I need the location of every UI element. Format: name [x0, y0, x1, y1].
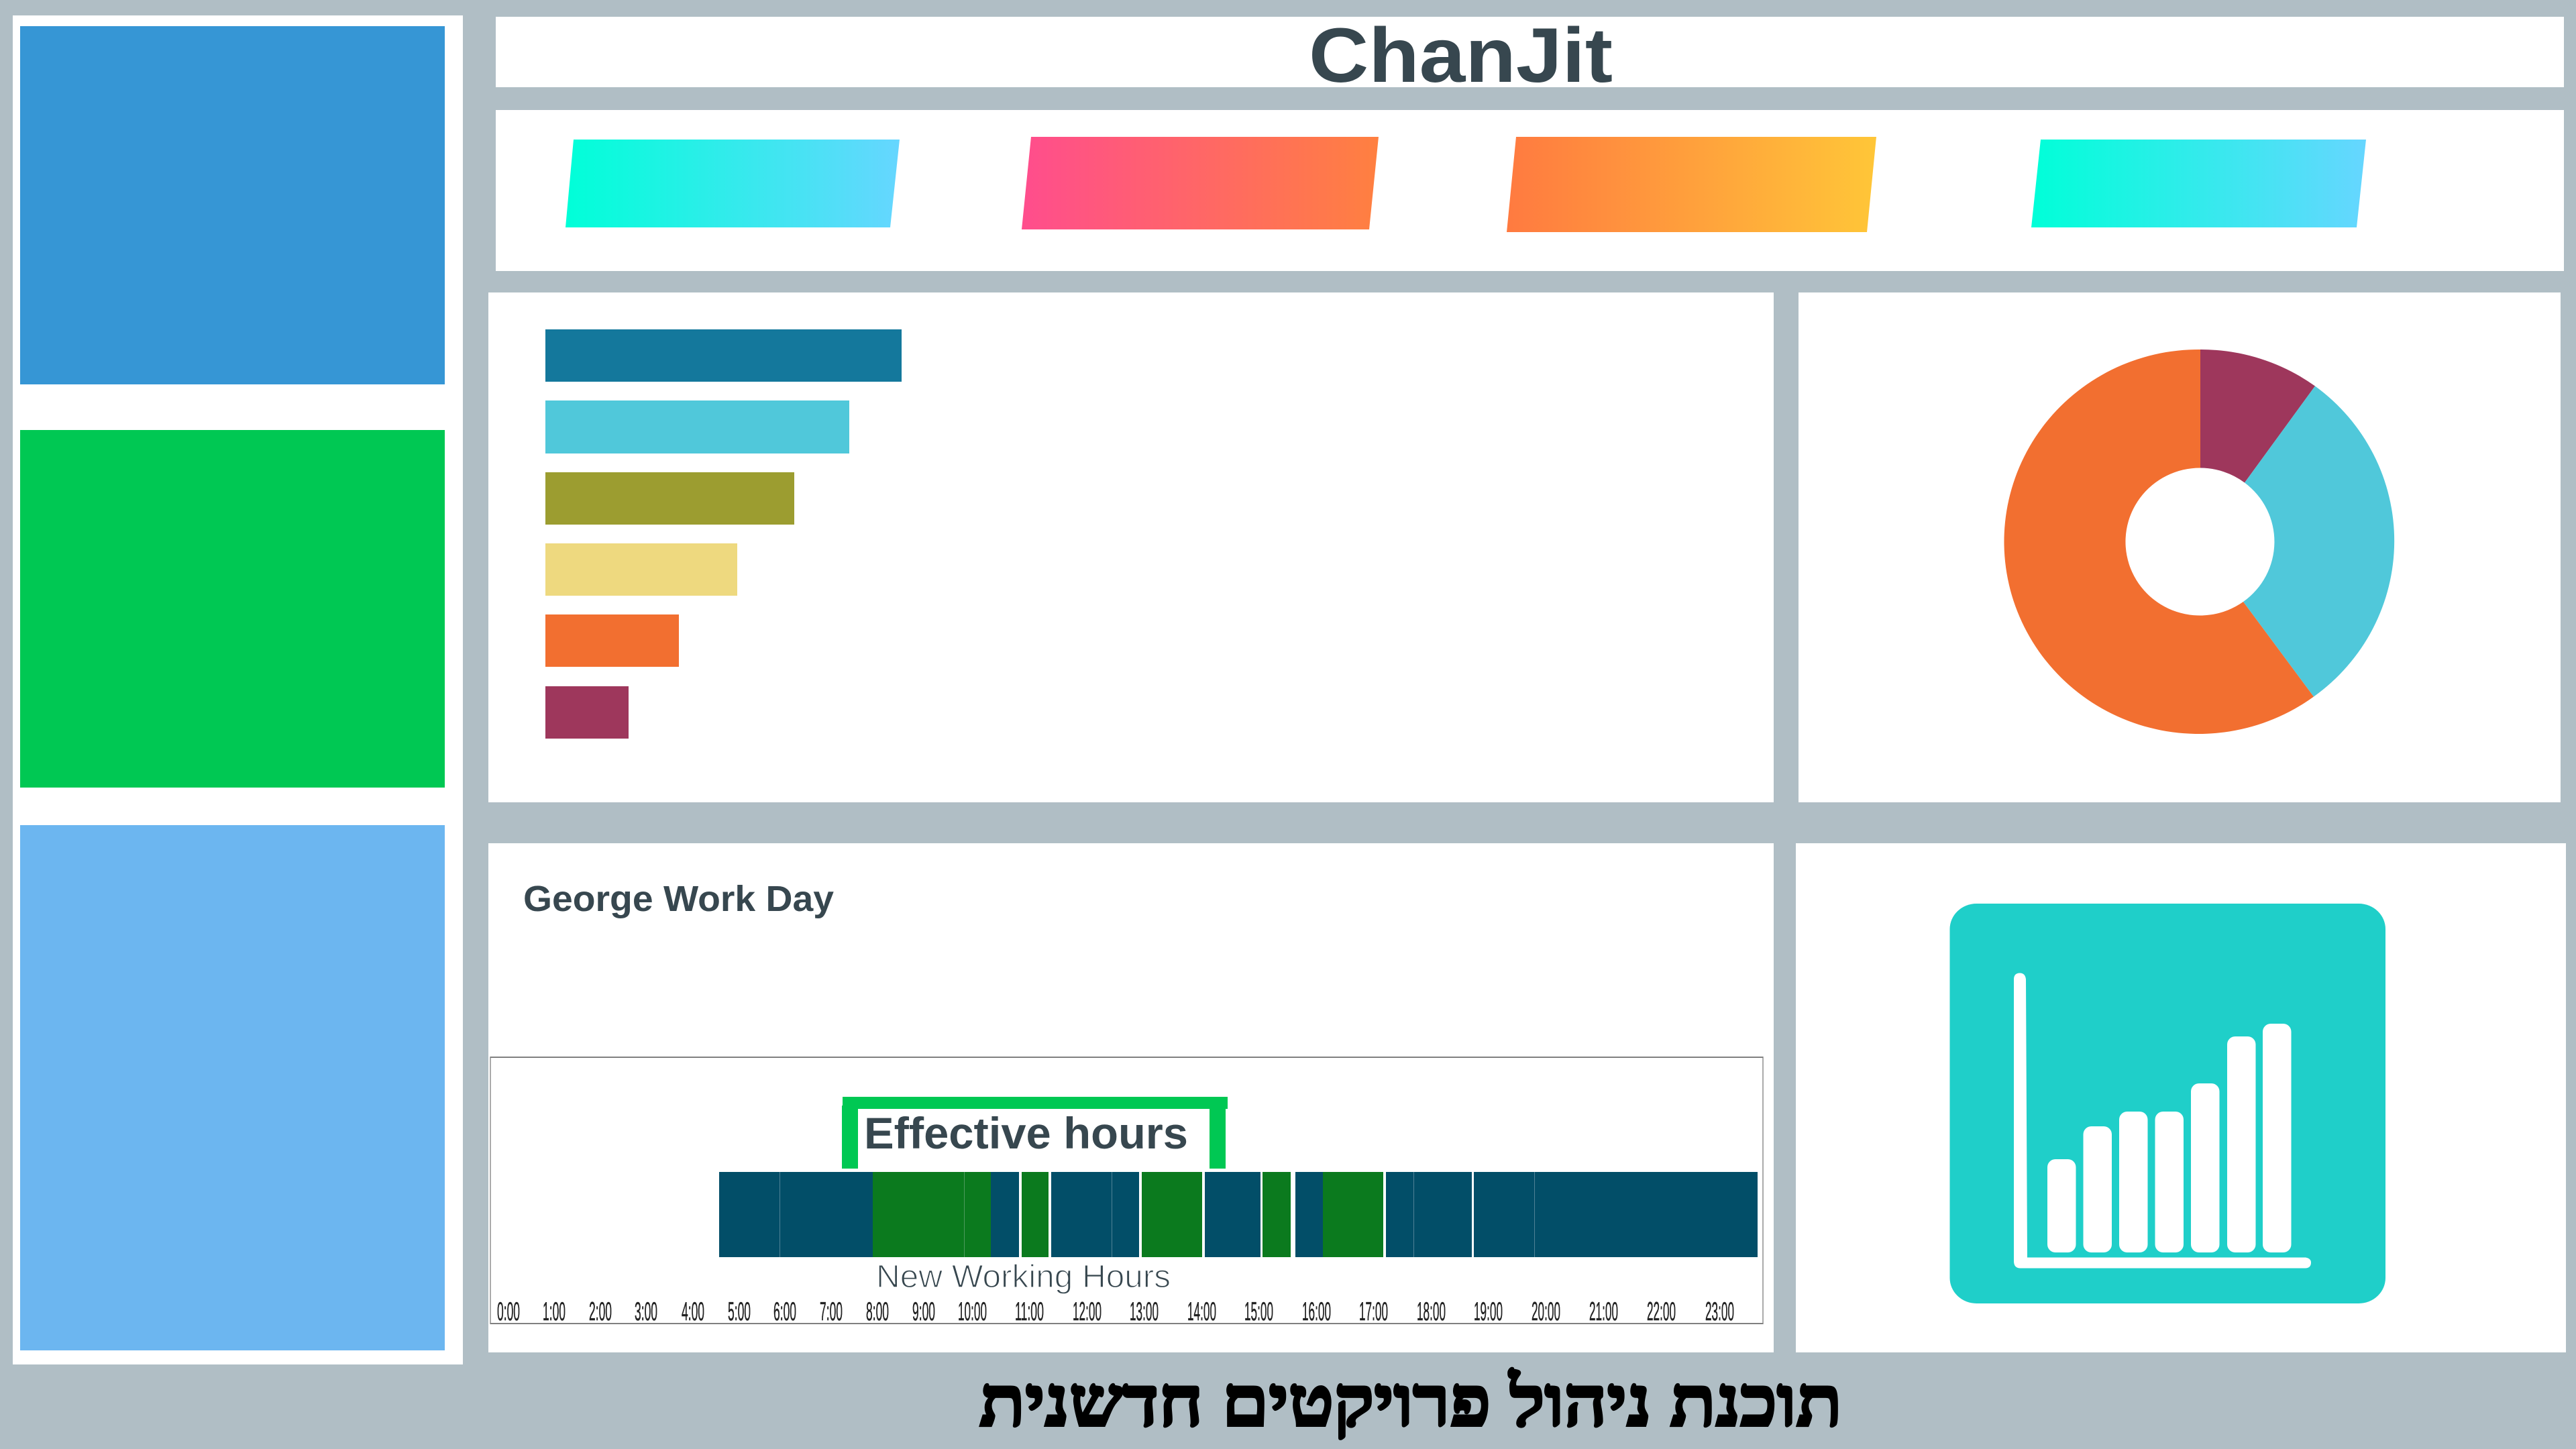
- time axis labels: 17:00: [1359, 1297, 1388, 1326]
- title: ChanJit: [1309, 13, 1613, 99]
- time axis labels: 4:00: [682, 1297, 704, 1326]
- timeline segments: [719, 1172, 1758, 1257]
- bar 4: [545, 543, 737, 596]
- bar 2: [545, 400, 849, 453]
- time axis labels: 3:00: [635, 1297, 657, 1326]
- time axis labels: 13:00: [1130, 1297, 1159, 1326]
- time axis labels: 10:00: [958, 1297, 987, 1326]
- panel: left column with three KPI cards: [13, 15, 463, 1364]
- time axis labels: 6:00: [773, 1297, 796, 1326]
- time axis labels: 0:00: [497, 1297, 520, 1326]
- time axis labels: 22:00: [1647, 1297, 1676, 1326]
- panel: title bar: [496, 13, 2564, 99]
- time axis labels: 5:00: [728, 1297, 751, 1326]
- bar 6: [545, 686, 629, 739]
- time axis labels: 2:00: [589, 1297, 612, 1326]
- panel: gradient tiles: [496, 110, 2564, 271]
- donut slice: purple: [2200, 350, 2315, 483]
- timeline chart: [490, 1057, 1763, 1326]
- time axis labels: 11:00: [1015, 1297, 1044, 1326]
- time axis labels: 8:00: [866, 1297, 889, 1326]
- timeline chart: 23:00: [1705, 1297, 1734, 1326]
- bar 3: [545, 472, 794, 525]
- donut slice: orange: [2004, 350, 2314, 734]
- time axis labels: 9:00: [912, 1297, 935, 1326]
- time axis labels: 16:00: [1302, 1297, 1331, 1326]
- tile: pink: [1022, 137, 1379, 229]
- time axis labels: 1:00: [543, 1297, 566, 1326]
- bar 1: [545, 329, 902, 382]
- donut slice: cyan: [2243, 386, 2394, 696]
- time axis labels: 7:00: [820, 1297, 843, 1326]
- bar 5: [545, 614, 679, 667]
- time axis labels: 12:00: [1073, 1297, 1102, 1326]
- time axis labels: 20:00: [1532, 1297, 1560, 1326]
- panel: icon card: [1796, 843, 2566, 1352]
- tile: cyan 2: [2031, 140, 2366, 227]
- tile: cyan 1: [566, 140, 900, 227]
- card: green: [20, 430, 445, 788]
- tile: orange: [1507, 137, 1876, 232]
- panel: George work day: [488, 843, 1774, 1352]
- time axis labels: 21:00: [1589, 1297, 1618, 1326]
- heading: George Work Day: [523, 879, 834, 919]
- card: light blue: [20, 825, 445, 1350]
- panel: bar chart: [488, 292, 1774, 802]
- time axis labels: 18:00: [1417, 1297, 1446, 1326]
- new working hours label: New Working Hours: [876, 1259, 1171, 1295]
- footer hebrew title: תוכנת ניהול פרויקטים חדשנית: [979, 1364, 1842, 1441]
- icon: bar chart on teal tile: [1949, 904, 2385, 1303]
- time axis labels: 15:00: [1244, 1297, 1273, 1326]
- time axis labels: [497, 1297, 1734, 1326]
- card: blue: [20, 26, 445, 384]
- effective hours label: Effective hours: [864, 1108, 1188, 1158]
- time axis labels: 14:00: [1187, 1297, 1216, 1326]
- time axis labels: 19:00: [1474, 1297, 1503, 1326]
- panel: donut chart: [1799, 292, 2561, 802]
- effective hours bracket: [842, 1097, 1228, 1169]
